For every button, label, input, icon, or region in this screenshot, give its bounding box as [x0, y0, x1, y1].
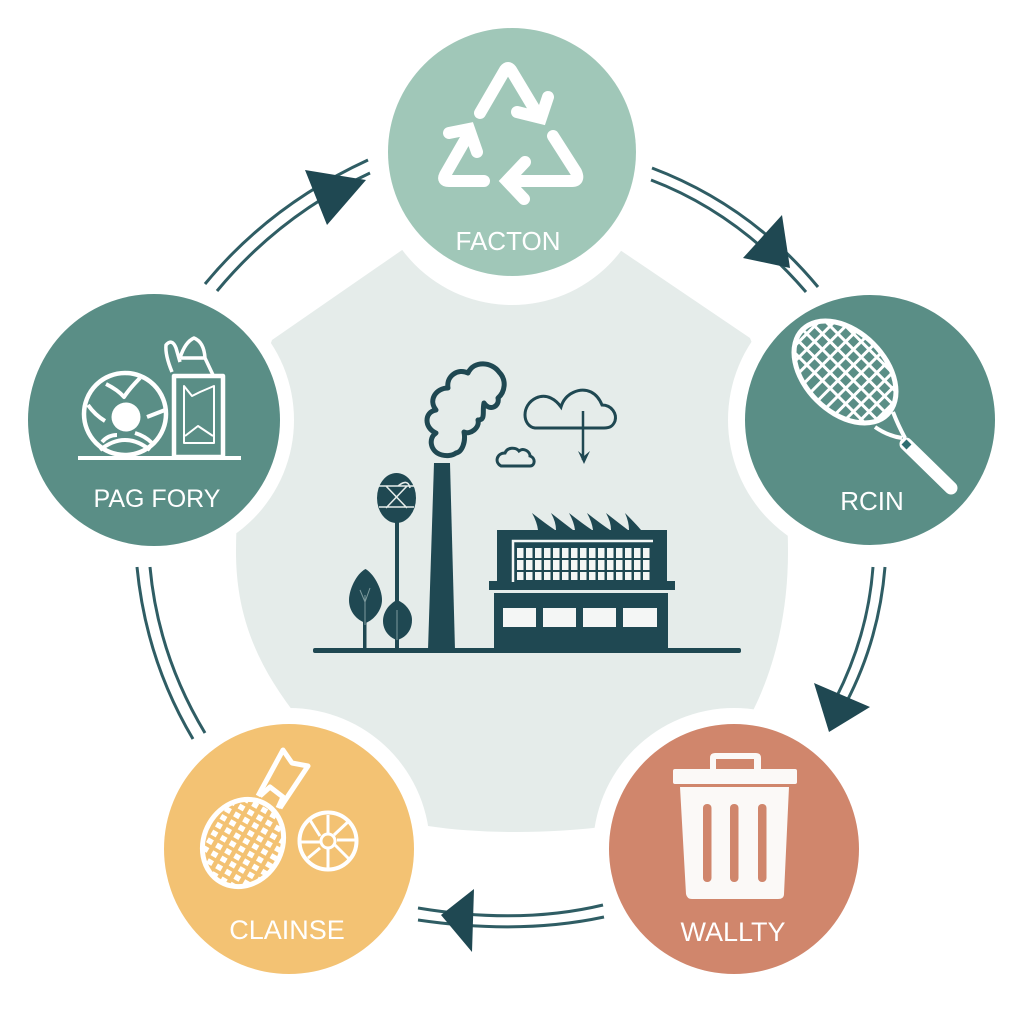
- icon: recycle: [444, 68, 577, 199]
- icon: racket: [792, 318, 958, 494]
- central illustration: factory: [313, 364, 741, 653]
- arrow: left to top: [205, 160, 370, 291]
- icon: trash can: [673, 753, 797, 899]
- icon: racket and wheel: [200, 748, 358, 890]
- icon: factory building: [489, 513, 675, 650]
- label: PAG FORY: [94, 485, 221, 513]
- icon: ball and box: [78, 338, 241, 458]
- central background panel: [236, 235, 788, 832]
- panel: bottom right node WALLTY: [609, 724, 859, 974]
- connector: bottom left to left: [137, 567, 205, 739]
- icon: small cloud: [497, 448, 534, 466]
- panel: top node FACTON: [388, 28, 636, 276]
- label: WALLTY: [680, 917, 786, 947]
- icon: cloud with arrow: [525, 390, 615, 464]
- panel: right node RCIN: [745, 295, 995, 545]
- windows: [517, 553, 652, 576]
- panel: bottom left node CLAINSE: [164, 724, 414, 974]
- icon: trees and lamp: [349, 473, 416, 650]
- panel: left node PAGFORY: [28, 294, 280, 546]
- label: RCIN: [840, 486, 904, 516]
- ground line: [313, 648, 741, 653]
- arrow: bottom right to bottom left: [418, 889, 604, 952]
- arrow: right to bottom right: [814, 567, 885, 732]
- icon: chimney: [428, 463, 455, 650]
- arrow: top to right: [651, 168, 818, 292]
- label: FACTON: [456, 226, 560, 256]
- label: CLAINSE: [229, 915, 345, 945]
- icon: smoke: [427, 364, 504, 456]
